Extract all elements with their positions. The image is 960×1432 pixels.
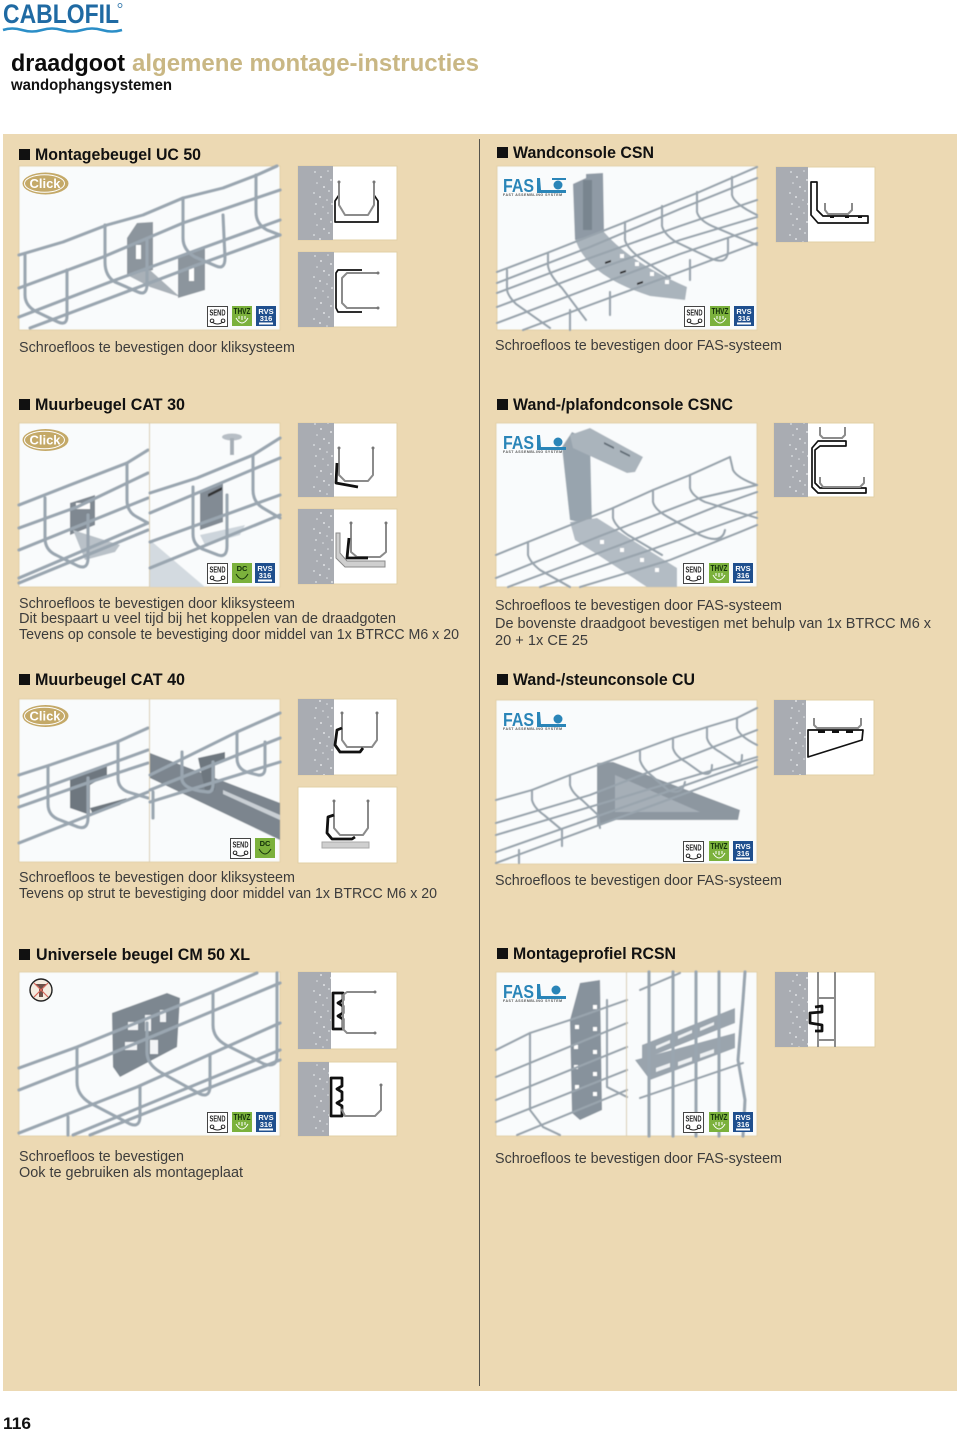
product photo: CU console [496, 700, 757, 864]
badges: SEND, THVZ, RVS 316 [684, 563, 753, 584]
badges: SEND, THVZ, RVS 316: THVZ [234, 1112, 250, 1122]
badges: SEND, THVZ, RVS 316: SEND [210, 1114, 226, 1124]
title: algemene montage-instructies [132, 50, 479, 77]
caption: Schroefloos te bevestigen [19, 1149, 184, 1165]
badges: SEND, THVZ, RVS 316: 316 [737, 849, 749, 858]
FAS logo [503, 176, 566, 197]
caption: Schroefloos te bevestigen door kliksysteem [19, 340, 295, 356]
heading: Wand-/plafondconsole CSNC: Wand-/plafondconsole CSNC [513, 396, 733, 414]
heading: Montageprofiel RCSN: Montageprofiel RCSN [513, 945, 676, 963]
heading: Muurbeugel CAT 40: Muurbeugel CAT 40 [35, 671, 185, 689]
badges: SEND, THVZ, RVS 316: SEND [686, 564, 702, 574]
caption: Ook te gebruiken als montageplaat [19, 1165, 243, 1181]
cross-section: wall [298, 699, 397, 775]
badges: SEND, THVZ, RVS 316: THVZ [234, 306, 250, 316]
badges: SEND, DC, RVS 316: RVS [257, 564, 273, 573]
badges: SEND, THVZ, RVS 316: RVS [736, 307, 752, 316]
panel: Muurbeugel CAT 40 [19, 671, 437, 902]
caption: Tevens op console te bevestiging door middel van 1x BTRCC M6 x 20 [19, 627, 459, 643]
panel: Wand-/steunconsole CU [495, 671, 874, 889]
caption [19, 870, 437, 902]
badges: SEND, THVZ, RVS 316: SEND [210, 308, 226, 318]
click badge [22, 429, 68, 451]
badges: SEND, DC: DC [260, 839, 271, 848]
cross-section: strut [298, 787, 397, 863]
panel: Wand-/plafondconsole CSNC [495, 396, 932, 649]
heading: Montagebeugel UC 50: Montagebeugel UC 50 [35, 146, 201, 164]
caption: Schroefloos te bevestigen door FAS-systeem [495, 873, 782, 889]
caption: Tevens op strut te bevestiging door middel van 1x BTRCC M6 x 20 [19, 886, 437, 902]
caption [19, 596, 459, 643]
FAS logo: FAST ASSEMBLING SYSTEM [503, 999, 562, 1003]
caption: De bovenste draadgoot bevestigen met behulp van 1x BTRCC M6 x [495, 616, 932, 632]
heading: Wand-/steunconsole CU: Wand-/steunconsole CU [513, 671, 695, 689]
badges: SEND, THVZ, RVS 316 [208, 1112, 276, 1132]
FAS logo: FAS [503, 433, 534, 453]
caption: 20 + 1x CE 25 [495, 633, 588, 649]
badges: SEND, THVZ, RVS 316: RVS [258, 307, 274, 316]
caption [19, 1149, 243, 1181]
product photo: RCSN mounting profile [496, 972, 757, 1136]
click badge [22, 705, 68, 727]
panel: Wandconsole CSN [495, 144, 875, 354]
badges: SEND, THVZ, RVS 316: THVZ [710, 841, 728, 851]
badges: SEND, THVZ, RVS 316: 316 [260, 1120, 272, 1129]
badges: SEND, THVZ, RVS 316: SEND [686, 842, 702, 852]
FAS logo [503, 982, 566, 1003]
badges: SEND, DC: SEND [232, 840, 248, 850]
product photo: CAT 40 wall and strut mount [19, 699, 280, 862]
caption: Dit bespaart u veel tijd bij het koppelen van de draadgoten [19, 611, 396, 627]
caption: Schroefloos te bevestigen door kliksysteem [19, 870, 295, 886]
badges: SEND, THVZ, RVS 316: 316 [737, 1120, 749, 1129]
badges: SEND, THVZ, RVS 316: 316 [738, 314, 750, 323]
icon: no screws [30, 979, 52, 1001]
cross-section: wall mounted sideways [298, 252, 397, 327]
badges: SEND, THVZ, RVS 316: SEND [686, 1114, 702, 1124]
badges: SEND, THVZ, RVS 316: RVS [258, 1113, 274, 1122]
product photo: CSNC console [496, 423, 757, 587]
cross-section: CSN [776, 167, 875, 242]
badges: SEND, THVZ, RVS 316: SEND [686, 308, 702, 318]
caption: Schroefloos te bevestigen door FAS-systeem [495, 1151, 782, 1167]
heading: Muurbeugel CAT 30: Muurbeugel CAT 30 [35, 396, 185, 414]
caption: Schroefloos te bevestigen door FAS-systeem [495, 598, 782, 614]
caption: Schroefloos te bevestigen door FAS-systeem [495, 338, 782, 354]
cross-section: upright [298, 1062, 397, 1136]
badges: SEND, DC, RVS 316 [208, 563, 275, 584]
badges: SEND, THVZ, RVS 316: THVZ [712, 306, 728, 316]
badges: SEND, DC [230, 838, 275, 858]
badges: SEND, DC, RVS 316: 316 [259, 571, 271, 580]
badges: SEND, THVZ, RVS 316: RVS [735, 1113, 751, 1122]
click badge: Click [30, 176, 61, 191]
cross-section: wall mount [298, 423, 397, 497]
badges: SEND, DC, RVS 316: SEND [210, 564, 226, 574]
badges: SEND, THVZ, RVS 316 [208, 306, 276, 326]
badges: SEND, THVZ, RVS 316 [684, 306, 754, 326]
panel: Montagebeugel UC 50 [19, 146, 397, 356]
caption [495, 598, 932, 649]
cross-section: wall mounted upright [298, 166, 397, 240]
badges: SEND, THVZ, RVS 316 [684, 841, 753, 862]
FAS logo: FAST ASSEMBLING SYSTEM [503, 193, 562, 197]
badges: SEND, THVZ, RVS 316: RVS [735, 842, 751, 851]
badges: SEND, THVZ, RVS 316: RVS [735, 564, 751, 573]
FAS logo: FAS [503, 982, 534, 1002]
panel: Muurbeugel CAT 30 [19, 396, 459, 643]
FAS logo: FAS [503, 176, 534, 196]
badges: SEND, THVZ, RVS 316: THVZ [710, 563, 728, 573]
cross-section: sideways [298, 972, 397, 1049]
click badge: Click [30, 708, 61, 724]
FAS logo [503, 433, 566, 454]
panel: Universele beugel CM 50 XL [19, 946, 397, 1181]
product photo: UC 50 bracket in wire tray [19, 166, 280, 330]
caption: Schroefloos te bevestigen door kliksysteem [19, 596, 295, 612]
panel: Montageprofiel RCSN [495, 945, 875, 1167]
FAS logo [503, 710, 566, 731]
title: draadgoot [11, 50, 125, 77]
heading: Universele beugel CM 50 XL: Universele beugel CM 50 XL [36, 946, 250, 964]
cross-section: CSNC [774, 423, 874, 497]
FAS logo: FAST ASSEMBLING SYSTEM [503, 727, 562, 731]
badges: SEND, THVZ, RVS 316 [684, 1112, 753, 1132]
click badge [22, 172, 68, 194]
badges: SEND, THVZ, RVS 316: 316 [737, 571, 749, 580]
subtitle: wandophangsystemen [10, 77, 172, 94]
heading: Wandconsole CSN: Wandconsole CSN [513, 144, 654, 162]
badges: SEND, DC, RVS 316: DC [237, 564, 248, 573]
product photo: CSN console [497, 166, 757, 330]
cross-section: CU [774, 700, 874, 775]
click badge: Click [30, 432, 61, 448]
product photo: CAT 30 wall mount [19, 423, 280, 587]
FAS logo: FAS [503, 710, 534, 730]
FAS logo: FAST ASSEMBLING SYSTEM [503, 450, 562, 454]
product photo: CM 50 XL bracket [19, 972, 280, 1136]
cross-section: RCSN [775, 972, 875, 1047]
badges: SEND, THVZ, RVS 316: THVZ [710, 1112, 728, 1122]
cross-section: on console [298, 509, 397, 584]
column divider [478, 139, 480, 1386]
badges: SEND, THVZ, RVS 316: 316 [260, 314, 272, 323]
